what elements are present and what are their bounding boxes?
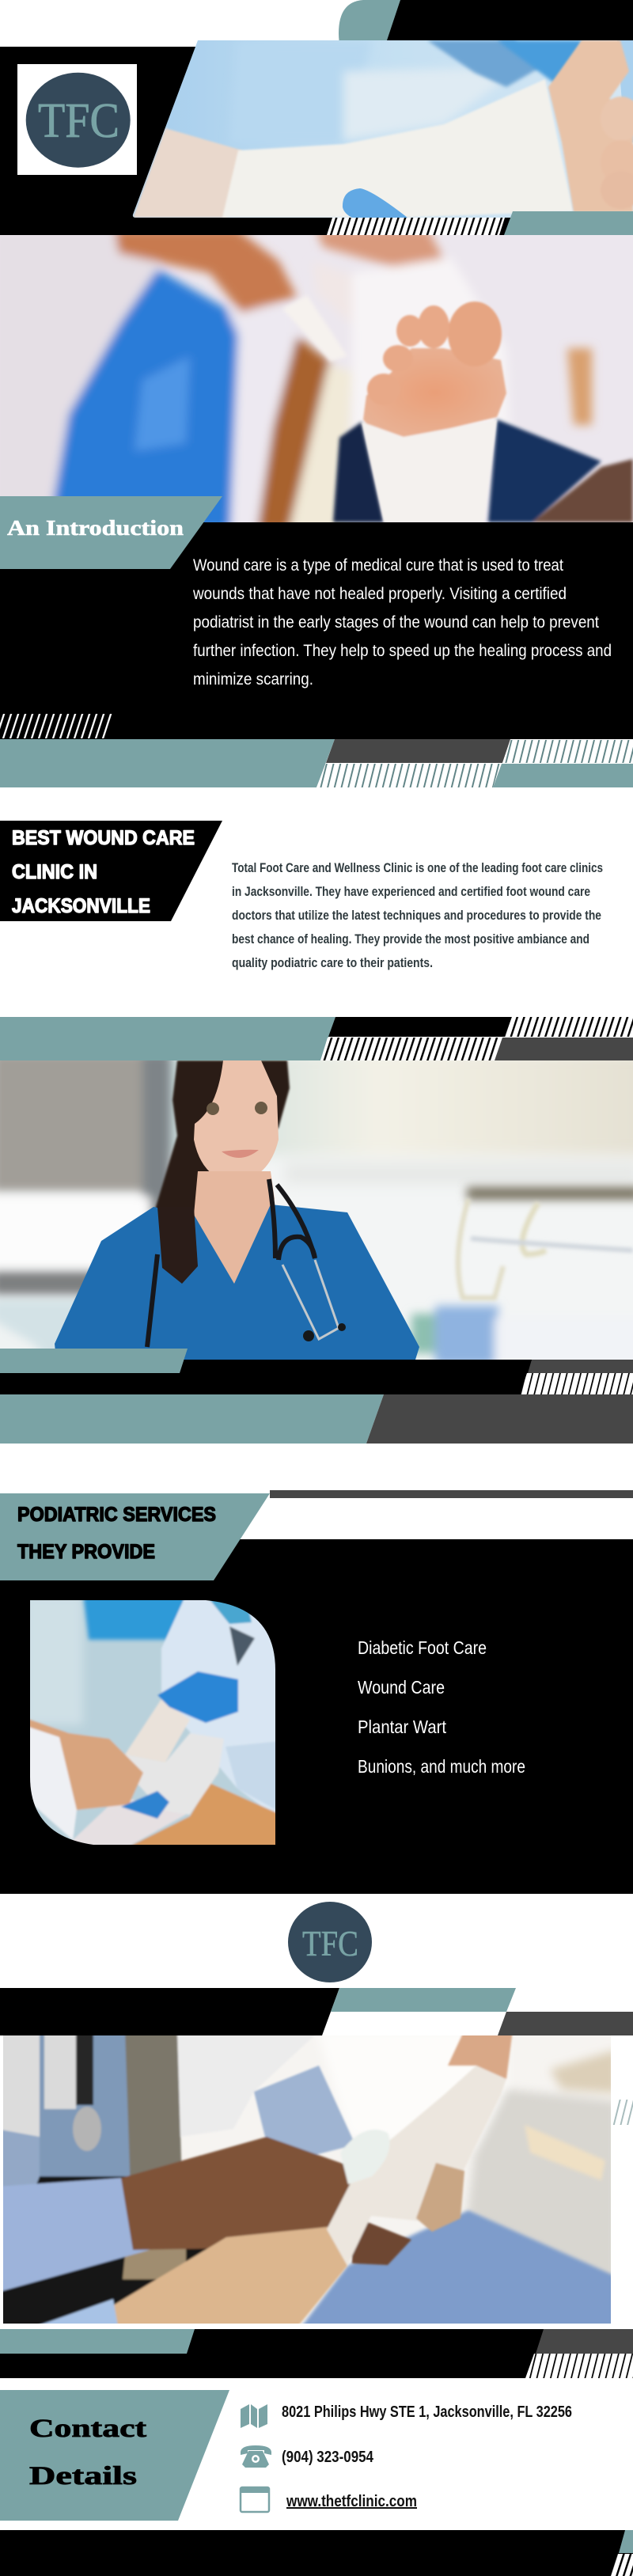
header band bbox=[0, 0, 633, 235]
icon: browser window bbox=[241, 2487, 269, 2512]
heading tab: An Introduction bbox=[0, 496, 222, 569]
foot sole bbox=[362, 302, 506, 522]
teal corner block bbox=[504, 211, 633, 235]
intro paragraph: podiatrist in the early stages of the wound can help to prevent bbox=[193, 613, 599, 632]
icon: map bbox=[241, 2404, 267, 2428]
heading tab: An Introduction: An Introduction bbox=[7, 516, 184, 540]
heading: best wound care clinic: JACKSONVILLE bbox=[12, 895, 150, 917]
heading: best wound care clinic: CLINIC IN bbox=[12, 861, 97, 883]
photo: doctor wrapping patient's ankle bbox=[0, 2030, 617, 2331]
icon: telephone bbox=[241, 2445, 271, 2468]
heading: best wound care clinic bbox=[0, 821, 222, 921]
heading tab: podiatric services: PODIATRIC SERVICES bbox=[17, 1504, 216, 1526]
services panel bbox=[0, 1490, 633, 1894]
intro paragraph: Wound care is a type of medical cure that is used to treat bbox=[193, 556, 563, 575]
photo: bandaging a foot bbox=[24, 1595, 281, 1852]
heading tab: contact details: Details bbox=[29, 2462, 137, 2491]
photo: doctor examining patient's foot bbox=[0, 230, 633, 530]
footer band bbox=[0, 2530, 633, 2576]
white stripes bbox=[0, 714, 115, 738]
heading tab: podiatric services: THEY PROVIDE bbox=[17, 1541, 155, 1563]
clinic paragraph: quality podiatric care to their patients. bbox=[232, 956, 433, 970]
heading tab: podiatric services bbox=[0, 1493, 270, 1580]
intro paragraph: wounds that have not healed properly. Visiting a certified bbox=[192, 585, 567, 603]
logo: TFC circle bbox=[288, 1902, 372, 1982]
photo: smiling nurse in blue scrubs bbox=[0, 1053, 633, 1365]
teal rounded tab bbox=[339, 0, 400, 61]
heading: best wound care clinic: BEST WOUND CARE bbox=[12, 827, 195, 849]
stripes under top photo bbox=[327, 218, 505, 235]
services list bbox=[358, 1637, 525, 1777]
divider row 4 bbox=[0, 1988, 633, 2035]
divider row 3 bbox=[0, 1349, 633, 1444]
photo: bandaged foot held by gloved hands bbox=[127, 40, 633, 218]
services list: Diabetic Foot Care bbox=[358, 1637, 487, 1658]
logo: TFC: TFC bbox=[38, 94, 119, 148]
heading tab: contact details bbox=[0, 2390, 229, 2521]
intro paragraph bbox=[192, 556, 612, 689]
address: 8021 Philips Hwy STE 1, Jacksonville, FL 32256 bbox=[282, 2403, 572, 2421]
logo: TFC bbox=[17, 64, 137, 175]
black top bar bbox=[385, 0, 633, 47]
divider row 1 bbox=[0, 739, 633, 787]
intro panel bbox=[0, 496, 633, 739]
intro paragraph: minimize scarring. bbox=[193, 670, 313, 689]
heading tab: contact details: Contact bbox=[29, 2415, 146, 2443]
black band bbox=[0, 47, 633, 235]
clinic paragraph bbox=[232, 861, 603, 970]
nurse figure bbox=[55, 1060, 419, 1360]
logo: TFC circle: TFC bbox=[302, 1923, 358, 1963]
face details bbox=[207, 1102, 219, 1115]
services list: Wound Care bbox=[358, 1677, 445, 1698]
divider row 5 bbox=[0, 2329, 633, 2378]
divider row 2 bbox=[0, 1017, 633, 1060]
phone number: (904) 323-0954 bbox=[282, 2449, 374, 2466]
website: www.thetfclinic.com bbox=[286, 2493, 417, 2510]
contact list bbox=[241, 2403, 572, 2512]
services list: Plantar Wart bbox=[358, 1717, 447, 1737]
small teal stripes bbox=[611, 2100, 633, 2125]
services list: Bunions, and much more bbox=[358, 1756, 525, 1777]
stethoscope bbox=[147, 1179, 315, 1347]
